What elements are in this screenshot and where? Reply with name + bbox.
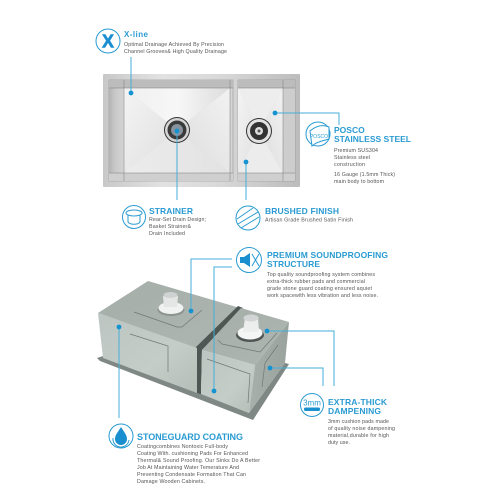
feature: brushed finish [236, 206, 353, 230]
icon: water drop [109, 424, 133, 448]
text: soundproofing description: work spacewith less vibration and less noise. [267, 293, 378, 299]
text: X-line description: Channel Grooves& High Quality Drainage [124, 49, 227, 55]
text: soundproofing description: grade stone guard coating ensured aquiet [267, 286, 373, 292]
small bowl top [202, 308, 289, 365]
heading: POSCO stainless steel: POSCO [334, 125, 365, 135]
heading: strainer: STRAINER [149, 206, 193, 216]
text: dampening description: duty use. [328, 440, 350, 446]
text: POSCO description: construction [334, 162, 365, 168]
flange [97, 356, 289, 420]
text: POSCO description: Premium SUS304 [334, 148, 378, 154]
text: strainer description: Basket Strainer& [149, 224, 191, 230]
text: stoneguard description: Coatingcombines Nontoxic Full-body [137, 444, 228, 450]
small bowl side [249, 322, 289, 413]
text: stoneguard description: Damage Wooden Cabinets. [137, 479, 205, 485]
icon: brushed lines [236, 206, 260, 230]
left bowl floor [109, 80, 233, 181]
large bowl top [98, 281, 240, 349]
text: strainer description: Drain Included [149, 231, 185, 237]
text: stoneguard description: Coating With. cushioning Pads For Enhanced [137, 451, 248, 457]
right bowl floor [238, 80, 295, 181]
icon: strainer basket [122, 206, 146, 228]
small bowl front [201, 350, 255, 413]
text: POSCO description: Stainless steel [334, 155, 370, 161]
text: stoneguard description: Preventing Condensate Formation That Can [137, 472, 246, 478]
heading: premium soundproofing structure: PREMIUM SOUNDPROOFING [267, 250, 388, 260]
text: dampening description: material,durable for high [328, 433, 389, 439]
right drain [246, 118, 272, 144]
large bowl front [98, 313, 197, 393]
text: POSCO description: main body to bottom [334, 179, 385, 185]
heading: X-line: X-line [124, 30, 149, 39]
heading: POSCO stainless steel: STAINLESS STEEL [334, 134, 411, 144]
heading: stoneguard coating: STONEGUARD COATING [137, 432, 243, 442]
feature: stoneguard coating [109, 424, 260, 485]
text: POSCO description: 16 Gauge (1.5mm Thick) [334, 172, 395, 178]
text: soundproofing description: Top quality soundproofing system combines [267, 272, 375, 278]
feature: X-line [96, 29, 227, 55]
large strainer [158, 292, 184, 316]
top view sink photo [103, 74, 300, 187]
text: stoneguard description: Thermal& Sound Proofing. Our Sinks Do A Better [137, 458, 260, 464]
feature: strainer [122, 206, 206, 237]
text: stoneguard description: Job At Maintaining Water Temerature And [137, 465, 239, 471]
text: X-line description: Optimal Drainage Achieved By Precision [124, 42, 224, 48]
heading: brushed finish: BRUSHED FINISH [265, 206, 339, 216]
pad outlines [130, 310, 278, 403]
text: dampening description: of quality noise dampening [328, 426, 395, 432]
text: soundproofing description: extra-thick rubber pads and commercial [267, 279, 365, 285]
icon: X circle: X [102, 32, 114, 52]
text: dampening description: 3mm cushion pads made [328, 419, 389, 425]
left drain [164, 117, 190, 143]
icon: muted speaker [236, 248, 262, 272]
heading: extra-thick dampening: EXTRA-THICK [328, 397, 388, 407]
small strainer [236, 314, 264, 342]
callout lines and dots [117, 57, 339, 418]
icon: 3mm pad: 3mm [303, 398, 321, 408]
gap between bowls [196, 306, 243, 394]
text: strainer description: Rear-Set Drain Design; [149, 217, 206, 223]
icon: POSCO badge: POSCO [310, 134, 328, 140]
bottom view sink photo [97, 281, 289, 420]
feature: extra-thick dampening [300, 394, 395, 446]
heading: premium soundproofing structure: STRUCTURE [267, 259, 320, 269]
heading: extra-thick dampening: DAMPENING [328, 406, 381, 416]
feature: premium soundproofing [236, 248, 388, 299]
text: brushed finish description: Artisan Grade Brushed Satin Finish [265, 218, 353, 224]
feature: POSCO stainless steel [306, 122, 411, 185]
